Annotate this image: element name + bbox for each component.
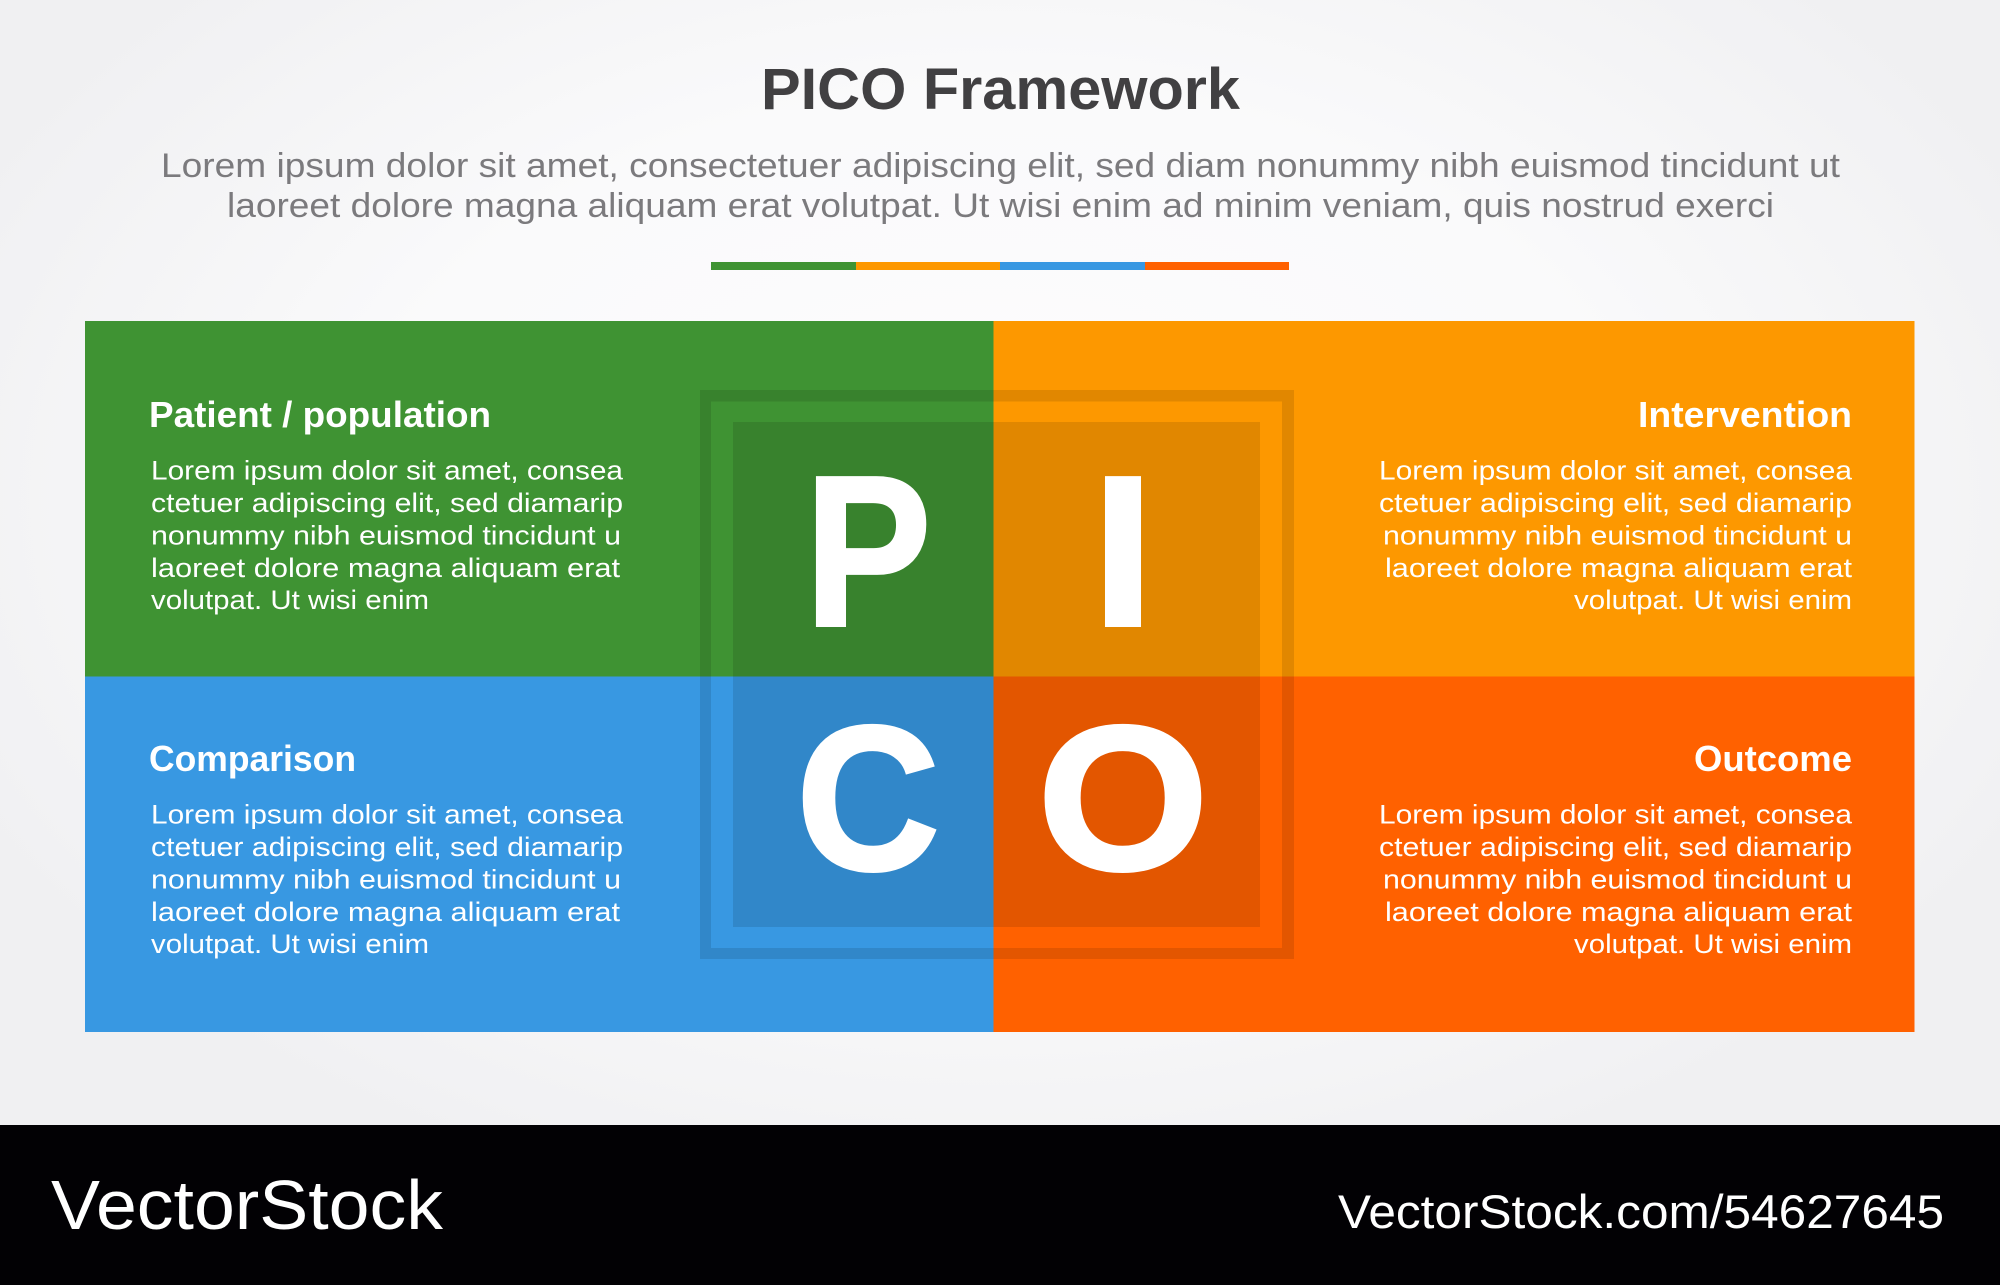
outer square frame (700, 390, 1294, 959)
text block: comparison: volutpat. Ut wisi enim (151, 929, 429, 959)
text block: patient / population: laoreet dolore magna aliquam erat (151, 553, 621, 583)
text block: patient / population: Lorem ipsum dolor sit amet, consea (151, 456, 624, 486)
letter C: C (797, 684, 939, 913)
panel: comparison (85, 676, 994, 1032)
inner dark square (733, 422, 1260, 927)
heading: intervention: Intervention (1638, 394, 1852, 435)
panel: outcome (994, 676, 1914, 1032)
text block: outcome (1379, 800, 1853, 959)
text block: intervention: nonummy nibh euismod tincidunt u (1383, 520, 1852, 550)
text block: patient / population: ctetuer adipiscing elit, sed diamarip (151, 488, 623, 518)
text block: outcome: volutpat. Ut wisi enim (1574, 929, 1852, 959)
text block: outcome: nonummy nibh euismod tincidunt u (1383, 864, 1852, 894)
heading: outcome: Outcome (1694, 738, 1852, 779)
centre PICO block (700, 390, 1294, 959)
text block: intervention: laoreet dolore magna aliquam erat (1385, 553, 1853, 583)
text block: comparison: Lorem ipsum dolor sit amet, consea (151, 800, 624, 830)
footer band (0, 1125, 2000, 1285)
letter P: P (805, 432, 931, 672)
subtitle text: Lorem ipsum dolor sit amet, consectetuer adipiscing elit, sed diam nonummy nibh euismod tincidunt ut (161, 147, 1841, 185)
text block: outcome: Lorem ipsum dolor sit amet, consea (1379, 800, 1853, 830)
text block: outcome: laoreet dolore magna aliquam erat (1385, 897, 1853, 927)
text block: intervention: volutpat. Ut wisi enim (1574, 585, 1852, 615)
letter O: O (1038, 684, 1208, 912)
panel: patient / population (85, 321, 994, 676)
text block: patient / population: volutpat. Ut wisi enim (151, 585, 429, 615)
text block: patient / population: nonummy nibh euismod tincidunt u (151, 520, 621, 550)
text block: outcome: ctetuer adipiscing elit, sed diamarip (1379, 832, 1852, 862)
subtitle text: laoreet dolore magna aliquam erat volutpat. Ut wisi enim ad minim veniam, quis nostrud exerci (227, 187, 1774, 225)
panel: intervention (994, 321, 1914, 676)
text block: intervention: Lorem ipsum dolor sit amet, consea (1379, 456, 1853, 486)
colour bar divider (711, 262, 1289, 270)
title: PICO Framework (761, 57, 1241, 122)
footer brand wordmark: VectorStock (51, 1166, 444, 1244)
text block: intervention: ctetuer adipiscing elit, sed diamarip (1379, 488, 1852, 518)
heading: comparison: Comparison (149, 738, 356, 779)
text block: comparison (151, 800, 624, 959)
heading: patient / population: Patient / population (149, 394, 491, 435)
letter I: I (1091, 430, 1155, 671)
footer image url: VectorStock.com/54627645 (1338, 1185, 1944, 1238)
text block: comparison: nonummy nibh euismod tincidunt u (151, 864, 621, 894)
subtitle text (161, 147, 1841, 225)
text block: intervention (1379, 456, 1853, 615)
text block: comparison: ctetuer adipiscing elit, sed diamarip (151, 832, 623, 862)
text block: comparison: laoreet dolore magna aliquam erat (151, 897, 621, 927)
text block: patient / population (151, 456, 624, 615)
